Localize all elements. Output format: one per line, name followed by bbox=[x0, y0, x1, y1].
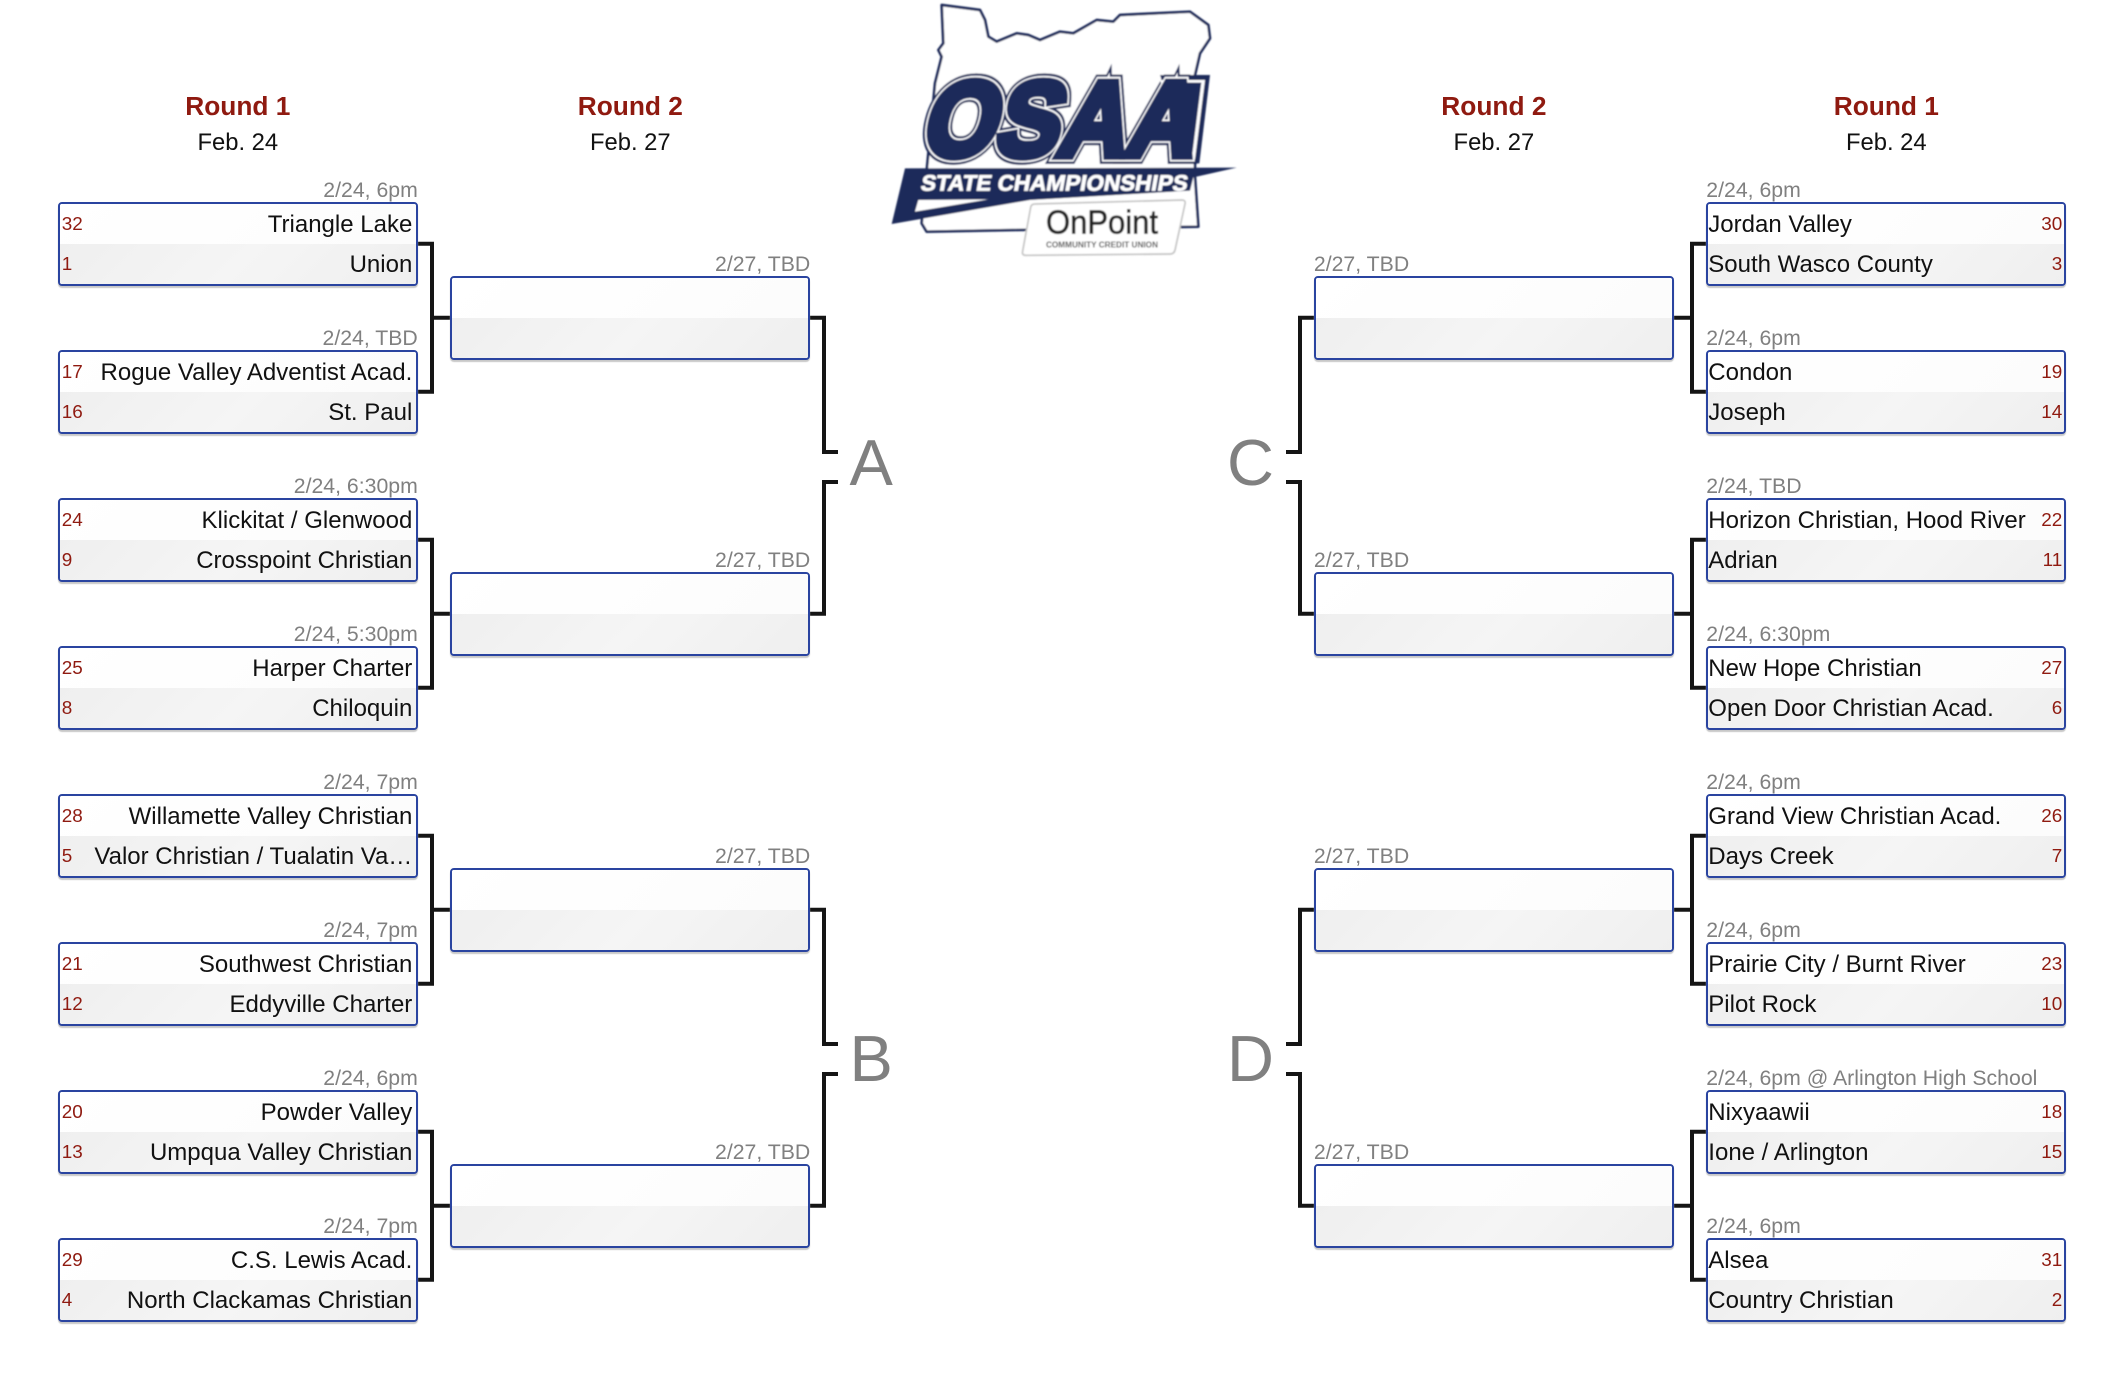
region letter D: D bbox=[1227, 1022, 1274, 1095]
team rows: Harper Charter bbox=[252, 654, 412, 682]
region letter B: B bbox=[850, 1022, 893, 1095]
team rows bbox=[1706, 794, 2066, 878]
heading: right round 2 bbox=[1441, 91, 1546, 156]
match: left round 2 game 4 bbox=[450, 1140, 810, 1250]
match: left round 2 game 3 bbox=[450, 844, 810, 954]
team rows: 25 bbox=[62, 658, 83, 678]
team rows: 2 bbox=[2052, 1290, 2062, 1311]
match: Powder Valley vs Umpqua: 2/24, 6pm bbox=[323, 1066, 418, 1090]
connector: region A bbox=[809, 318, 838, 614]
team rows: Open Door Christian Acad. bbox=[1708, 695, 1994, 722]
team rows: New Hope Christian bbox=[1708, 654, 1922, 682]
team rows: 23 bbox=[2041, 954, 2062, 974]
team rows: Joseph bbox=[1708, 399, 1786, 426]
match: Horizon Christian vs Adrian bbox=[1706, 474, 2066, 584]
match: New Hope vs Open Door bbox=[1706, 622, 2066, 732]
match: Willamette Valley vs Valor: 2/24, 7pm bbox=[323, 770, 418, 794]
team rows: Ione / Arlington bbox=[1708, 1139, 1868, 1166]
team rows: Days Creek bbox=[1708, 843, 1834, 870]
team rows bbox=[58, 498, 418, 582]
heading: left round 1 bbox=[185, 91, 290, 156]
team rows: Crosspoint Christian bbox=[196, 547, 412, 574]
team rows: Powder Valley bbox=[261, 1098, 412, 1126]
team rows: Horizon Christian, Hood River bbox=[1708, 506, 2026, 534]
match: Klickitat vs Crosspoint: 2/24, 6:30pm bbox=[294, 474, 418, 498]
team rows bbox=[1706, 942, 2066, 1026]
match: Condon vs Joseph: 2/24, 6pm bbox=[1706, 326, 1801, 350]
match: Condon vs Joseph bbox=[1706, 326, 2066, 436]
match: Southwest vs Eddyville: 2/24, 7pm bbox=[323, 918, 418, 942]
connector: left round 1 pair 2 bbox=[417, 540, 451, 688]
OnPoint sponsor badge bbox=[1022, 200, 1185, 255]
match: right round 2 game 3: 2/27, TBD bbox=[1314, 844, 1409, 868]
OnPoint sponsor badge: COMMUNITY CREDIT UNION bbox=[1046, 240, 1158, 249]
team rows bbox=[1706, 1090, 2066, 1174]
match: right round 2 game 1: 2/27, TBD bbox=[1314, 252, 1409, 276]
team rows: 9 bbox=[62, 550, 72, 571]
match: C.S. Lewis vs North Clackamas bbox=[58, 1214, 418, 1324]
team rows: 8 bbox=[62, 698, 72, 719]
match: right round 2 game 1 bbox=[1314, 252, 1674, 362]
team rows: 5 bbox=[62, 846, 72, 867]
connector: right round 1 pair 2 bbox=[1673, 540, 1707, 688]
empty team rows bbox=[450, 1164, 810, 1248]
match: Klickitat vs Crosspoint bbox=[58, 474, 418, 584]
team rows: Willamette Valley Christian bbox=[129, 802, 412, 830]
team rows: 24 bbox=[62, 510, 83, 530]
OnPoint sponsor badge: OnPoint bbox=[1046, 204, 1159, 241]
team rows: Country Christian bbox=[1708, 1287, 1894, 1314]
team rows bbox=[58, 1238, 418, 1322]
team rows: Alsea bbox=[1708, 1246, 1768, 1274]
team rows: 7 bbox=[2052, 846, 2062, 867]
team rows: 11 bbox=[2043, 550, 2062, 571]
team rows: 12 bbox=[62, 994, 83, 1015]
match: left round 2 game 3: 2/27, TBD bbox=[715, 844, 810, 868]
team rows bbox=[1706, 202, 2066, 286]
region letter C: C bbox=[1227, 426, 1274, 499]
match: Jordan Valley vs South Wasco County: 2/24, 6pm bbox=[1706, 178, 1801, 202]
team rows: Triangle Lake bbox=[268, 210, 412, 238]
connector: left round 1 pair 4 bbox=[417, 1132, 451, 1280]
team rows: 13 bbox=[62, 1142, 83, 1163]
match: Rogue Valley vs St. Paul bbox=[58, 326, 418, 436]
heading: right round 2: Round 2 bbox=[1441, 91, 1546, 121]
team rows: 18 bbox=[2041, 1102, 2062, 1122]
team rows: 6 bbox=[2052, 698, 2062, 719]
empty team rows bbox=[450, 572, 810, 656]
OSAA wordmark: OSAA bbox=[914, 60, 1215, 178]
match: Willamette Valley vs Valor bbox=[58, 770, 418, 880]
team rows bbox=[58, 942, 418, 1026]
match: Triangle Lake vs Union bbox=[58, 178, 418, 288]
match: Triangle Lake vs Union: 2/24, 6pm bbox=[323, 178, 418, 202]
team rows bbox=[58, 202, 418, 286]
team rows: 17 bbox=[62, 362, 83, 382]
team rows: Valor Christian / Tualatin Va… bbox=[94, 843, 412, 870]
heading: left round 2 bbox=[578, 91, 683, 156]
team rows: 10 bbox=[2041, 994, 2062, 1015]
match: right round 2 game 2 bbox=[1314, 548, 1674, 658]
match: Nixyaawii vs Ione / Arlington: 2/24, 6pm @ Arlington High School bbox=[1706, 1066, 2037, 1090]
match: left round 2 game 2 bbox=[450, 548, 810, 658]
team rows: 27 bbox=[2041, 658, 2062, 678]
team rows: 30 bbox=[2041, 214, 2062, 234]
team rows: Condon bbox=[1708, 358, 1792, 386]
match: right round 2 game 2: 2/27, TBD bbox=[1314, 548, 1409, 572]
match: Grand View vs Days Creek bbox=[1706, 770, 2066, 880]
team rows: 15 bbox=[2041, 1142, 2062, 1163]
match: Harper Charter vs Chiloquin bbox=[58, 622, 418, 732]
empty team rows bbox=[1314, 572, 1674, 656]
team rows: 32 bbox=[62, 214, 83, 234]
match: Jordan Valley vs South Wasco County bbox=[1706, 178, 2066, 288]
match: Grand View vs Days Creek: 2/24, 6pm bbox=[1706, 770, 1801, 794]
team rows bbox=[58, 794, 418, 878]
connector: left round 1 pair 3 bbox=[417, 836, 451, 984]
match: right round 2 game 4 bbox=[1314, 1140, 1674, 1250]
banner swoosh bbox=[892, 168, 1237, 224]
connector: right round 1 pair 3 bbox=[1673, 836, 1707, 984]
team rows: Adrian bbox=[1708, 547, 1778, 574]
team rows: Eddyville Charter bbox=[230, 991, 412, 1018]
team rows bbox=[58, 646, 418, 730]
team rows: Rogue Valley Adventist Acad. bbox=[101, 358, 412, 386]
team rows bbox=[1706, 350, 2066, 434]
match: right round 2 game 4: 2/27, TBD bbox=[1314, 1140, 1409, 1164]
heading: right round 1 bbox=[1834, 91, 1939, 156]
match: left round 2 game 2: 2/27, TBD bbox=[715, 548, 810, 572]
match: Horizon Christian vs Adrian: 2/24, TBD bbox=[1706, 474, 1802, 498]
heading: right round 1: Round 1 bbox=[1834, 91, 1939, 121]
match: right round 2 game 3 bbox=[1314, 844, 1674, 954]
OSAA wordmark: OSAA bbox=[914, 60, 1215, 178]
team rows: 16 bbox=[62, 402, 83, 423]
Oregon state outline bbox=[922, 5, 1210, 232]
match: New Hope vs Open Door: 2/24, 6:30pm bbox=[1706, 622, 1830, 646]
team rows: Chiloquin bbox=[312, 695, 412, 722]
empty team rows bbox=[1314, 1164, 1674, 1248]
team rows: Southwest Christian bbox=[199, 950, 412, 978]
region letter A: A bbox=[850, 426, 893, 499]
team rows: Nixyaawii bbox=[1708, 1098, 1810, 1126]
empty team rows bbox=[450, 276, 810, 360]
match: Harper Charter vs Chiloquin: 2/24, 5:30pm bbox=[294, 622, 418, 646]
logo: OSAA State Championships bbox=[890, 2, 1236, 257]
connector: region D bbox=[1286, 910, 1315, 1206]
connector: region C bbox=[1286, 318, 1315, 614]
team rows: 14 bbox=[2041, 402, 2062, 423]
State Championships text: STATE CHAMPIONSHIPS bbox=[919, 171, 1190, 196]
team rows bbox=[1706, 498, 2066, 582]
heading: right round 2: Feb. 27 bbox=[1454, 129, 1534, 156]
team rows: 26 bbox=[2041, 806, 2062, 826]
connector: right round 1 pair 1 bbox=[1673, 244, 1707, 392]
heading: right round 1: Feb. 24 bbox=[1846, 129, 1927, 156]
connector: left round 1 pair 1 bbox=[417, 244, 451, 392]
empty team rows bbox=[1314, 276, 1674, 360]
match: Southwest vs Eddyville bbox=[58, 918, 418, 1028]
team rows: C.S. Lewis Acad. bbox=[231, 1246, 412, 1274]
team rows: 21 bbox=[62, 954, 83, 974]
OSAA wordmark: OSAA bbox=[914, 60, 1215, 178]
match: Rogue Valley vs St. Paul: 2/24, TBD bbox=[322, 326, 418, 350]
empty team rows bbox=[450, 868, 810, 952]
team rows bbox=[1706, 646, 2066, 730]
heading: left round 2: Round 2 bbox=[578, 91, 683, 121]
team rows: 31 bbox=[2041, 1250, 2062, 1270]
match: left round 2 game 1 bbox=[450, 252, 810, 362]
team rows: 22 bbox=[2041, 510, 2062, 530]
match: Powder Valley vs Umpqua bbox=[58, 1066, 418, 1176]
team rows: Klickitat / Glenwood bbox=[202, 506, 412, 534]
match: Prairie City vs Pilot Rock bbox=[1706, 918, 2066, 1028]
team rows: Jordan Valley bbox=[1708, 210, 1852, 238]
team rows: Pilot Rock bbox=[1708, 991, 1816, 1018]
match: left round 2 game 1: 2/27, TBD bbox=[715, 252, 810, 276]
team rows: 1 bbox=[62, 254, 72, 275]
team rows: 29 bbox=[62, 1250, 83, 1270]
match: left round 2 game 4: 2/27, TBD bbox=[715, 1140, 810, 1164]
team rows: 4 bbox=[62, 1290, 72, 1311]
team rows: 20 bbox=[62, 1102, 83, 1122]
heading: left round 1: Feb. 24 bbox=[197, 129, 278, 156]
team rows: South Wasco County bbox=[1708, 251, 1933, 278]
heading: left round 1: Round 1 bbox=[185, 91, 290, 121]
connector: right round 1 pair 4 bbox=[1673, 1132, 1707, 1280]
match: Alsea vs Country Christian: 2/24, 6pm bbox=[1706, 1214, 1801, 1238]
empty team rows bbox=[1314, 868, 1674, 952]
match: Nixyaawii vs Ione / Arlington bbox=[1706, 1066, 2066, 1176]
team rows: 28 bbox=[62, 806, 83, 826]
team rows bbox=[58, 1090, 418, 1174]
team rows: Umpqua Valley Christian bbox=[150, 1139, 412, 1166]
connector: region B bbox=[809, 910, 838, 1206]
match: Alsea vs Country Christian bbox=[1706, 1214, 2066, 1324]
team rows: North Clackamas Christian bbox=[127, 1287, 412, 1314]
match: C.S. Lewis vs North Clackamas: 2/24, 7pm bbox=[323, 1214, 418, 1238]
team rows: 3 bbox=[2052, 254, 2062, 275]
team rows: Prairie City / Burnt River bbox=[1708, 950, 1966, 978]
heading: left round 2: Feb. 27 bbox=[590, 129, 671, 156]
team rows: Grand View Christian Acad. bbox=[1708, 802, 2001, 830]
team rows: 19 bbox=[2041, 362, 2062, 382]
team rows: St. Paul bbox=[328, 399, 412, 426]
team rows bbox=[58, 350, 418, 434]
match: Prairie City vs Pilot Rock: 2/24, 6pm bbox=[1706, 918, 1801, 942]
team rows: Union bbox=[350, 251, 412, 278]
team rows bbox=[1706, 1238, 2066, 1322]
